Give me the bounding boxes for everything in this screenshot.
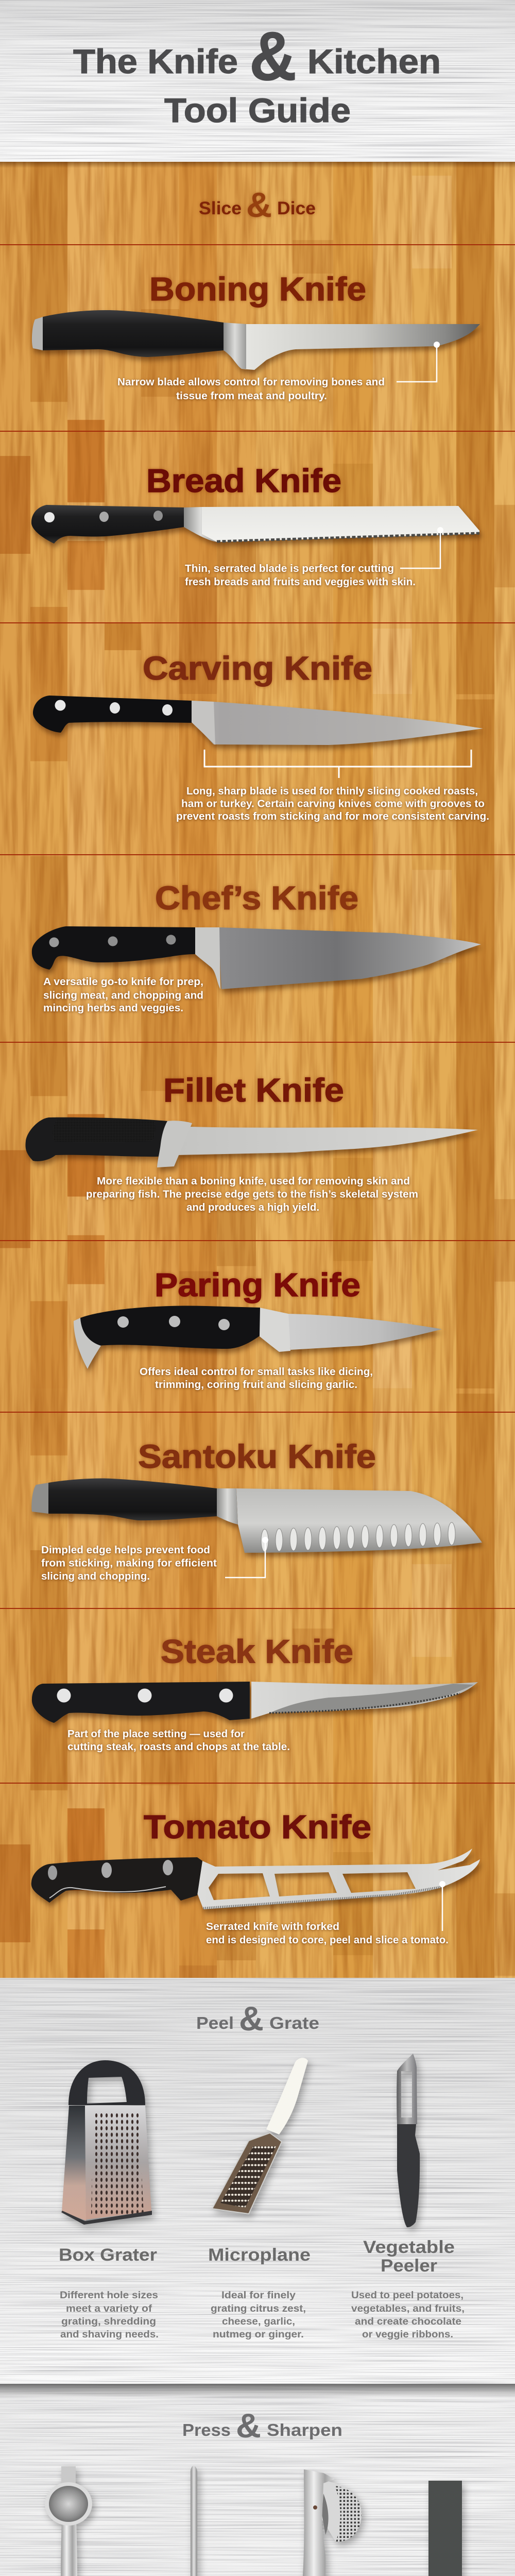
section: boning knife bbox=[32, 270, 480, 402]
tool: lemon press bbox=[45, 2466, 92, 2576]
callout line: forked end bbox=[439, 1881, 445, 1931]
heading: Steak Knife: Steak Knife bbox=[161, 1633, 353, 1670]
knife: tomato knife illustration bbox=[31, 1849, 480, 1909]
section: carving knife bbox=[33, 650, 489, 822]
description: boning knife: tissue from meat and poultry. bbox=[176, 391, 327, 402]
tool: potato ricer bbox=[302, 2469, 362, 2576]
description: santoku knife: slicing and chopping. bbox=[41, 1571, 150, 1582]
description: boning knife: Narrow blade allows control for removing bones and bbox=[117, 377, 385, 388]
panel: press and sharpen bbox=[0, 2384, 515, 2576]
description: microplane: nutmeg or ginger. bbox=[213, 2329, 304, 2340]
description: carving knife: ham or turkey. Certain carving knives come with grooves to bbox=[181, 799, 485, 810]
description: microplane: cheese, garlic, bbox=[222, 2316, 295, 2327]
description: vegetable peeler bbox=[351, 2290, 465, 2340]
bracket: blade length bbox=[204, 750, 471, 778]
section: bread knife bbox=[31, 462, 479, 588]
heading: Peel & Grate: & bbox=[239, 1999, 264, 2038]
description: microplane bbox=[211, 2290, 306, 2340]
panel: brushed steel header bbox=[0, 0, 515, 162]
tool: knife steel bbox=[183, 2466, 204, 2576]
description: santoku knife: Dimpled edge helps prevent food bbox=[41, 1545, 210, 1556]
heading: Boning Knife: Boning Knife bbox=[149, 270, 366, 308]
description: chef's knife bbox=[43, 976, 203, 1014]
tool: vegetable peeler bbox=[397, 2054, 420, 2227]
tool: sharpening stone bbox=[428, 2481, 462, 2576]
heading: Press & Sharpen: & bbox=[236, 2406, 261, 2445]
heading: Paring Knife: Paring Knife bbox=[154, 1266, 360, 1303]
description: tomato knife bbox=[206, 1921, 449, 1946]
description: carving knife: Long, sharp blade is used for thinly slicing cooked roasts, bbox=[186, 786, 478, 797]
description: vegetable peeler: vegetables, and fruits, bbox=[351, 2303, 465, 2314]
title: Tool Guide bbox=[164, 91, 351, 129]
heading: Fillet Knife: Fillet Knife bbox=[163, 1072, 344, 1109]
description: carving knife bbox=[176, 786, 489, 822]
description: steak knife: Part of the place setting — used for bbox=[67, 1728, 245, 1740]
heading: Press & Sharpen: Sharpen bbox=[267, 2420, 342, 2439]
label: Vegetable Peeler: Peeler bbox=[381, 2256, 437, 2276]
description: fillet knife: and produces a high yield. bbox=[186, 1202, 319, 1213]
title: & bbox=[249, 18, 297, 95]
label: Box Grater: Box Grater bbox=[59, 2245, 157, 2265]
description: fillet knife: More flexible than a boning knife, used for removing skin and bbox=[97, 1176, 410, 1187]
knife: fillet knife illustration bbox=[26, 1117, 478, 1167]
description: fillet knife: preparing fish. The precise edge gets to the fish’s skeletal system bbox=[86, 1189, 418, 1200]
knife: paring knife illustration bbox=[74, 1306, 442, 1369]
description: paring knife: trimming, coring fruit and slicing garlic. bbox=[155, 1379, 357, 1391]
section: tomato knife bbox=[31, 1808, 480, 1946]
description: steak knife: cutting steak, roasts and chops at the table. bbox=[67, 1741, 290, 1753]
panel: wood cutting board, slice and dice bbox=[0, 162, 515, 1978]
heading: Santoku Knife: Santoku Knife bbox=[138, 1438, 376, 1475]
description: vegetable peeler: Used to peel potatoes, bbox=[351, 2290, 464, 2301]
heading: Slice & Dice: Dice bbox=[277, 198, 316, 218]
title bbox=[73, 18, 441, 129]
tool: microplane bbox=[212, 2058, 308, 2214]
description: bread knife: fresh breads and fruits and veggies with skin. bbox=[185, 577, 416, 588]
section: chef's knife bbox=[32, 879, 481, 1014]
knife: bread knife illustration bbox=[31, 505, 479, 544]
heading: Peel & Grate: Peel bbox=[196, 2013, 234, 2032]
heading: Slice & Dice: & bbox=[246, 185, 272, 225]
label: Microplane: Microplane bbox=[208, 2245, 311, 2265]
description: chef's knife: slicing meat, and chopping and bbox=[43, 990, 203, 1002]
description: microplane: Ideal for finely bbox=[221, 2290, 296, 2301]
description: bread knife: Thin, serrated blade is perfect for cutting bbox=[185, 563, 394, 574]
description: santoku knife: from sticking, making for efficient bbox=[41, 1558, 217, 1569]
callout line: dimpled edge bbox=[225, 1537, 268, 1578]
tool: box grater bbox=[61, 2060, 152, 2225]
heading: Peel & Grate: Grate bbox=[269, 2013, 319, 2032]
callout line: serrated edge bbox=[400, 527, 443, 568]
section: fillet knife bbox=[26, 1072, 478, 1213]
label: Vegetable Peeler: Vegetable bbox=[363, 2238, 455, 2257]
description: box grater: grating, shredding bbox=[61, 2316, 156, 2327]
description: box grater bbox=[60, 2290, 159, 2340]
callout line: blade edge bbox=[397, 342, 440, 382]
heading: Slice & Dice bbox=[199, 185, 316, 225]
label: Box Grater bbox=[59, 2245, 159, 2340]
knife: steak knife illustration bbox=[32, 1682, 478, 1723]
description: box grater: and shaving needs. bbox=[60, 2329, 159, 2340]
description: tomato knife: Serrated knife with forked bbox=[206, 1921, 339, 1933]
description: santoku knife bbox=[41, 1545, 217, 1582]
description: fillet knife bbox=[86, 1176, 418, 1213]
description: steak knife bbox=[67, 1728, 290, 1753]
heading: Press & Sharpen bbox=[182, 2406, 342, 2445]
description: vegetable peeler: and create chocolate bbox=[355, 2316, 461, 2327]
knife: boning knife illustration bbox=[32, 310, 480, 370]
description: paring knife bbox=[140, 1366, 373, 1391]
panel: peel and grate bbox=[0, 1978, 515, 2384]
heading: Slice & Dice: Slice bbox=[199, 198, 242, 218]
knife: santoku knife illustration bbox=[31, 1478, 482, 1553]
description: boning knife bbox=[117, 377, 385, 402]
label: Vegetable Peeler bbox=[351, 2238, 465, 2340]
heading: Carving Knife: Carving Knife bbox=[143, 650, 372, 687]
description: vegetable peeler: or veggie ribbons. bbox=[362, 2329, 453, 2340]
heading: Bread Knife: Bread Knife bbox=[146, 462, 341, 499]
description: box grater: meet a variety of bbox=[66, 2303, 152, 2314]
description: chef's knife: mincing herbs and veggies. bbox=[43, 1003, 183, 1014]
title: Kitchen bbox=[307, 42, 441, 80]
description: paring knife: Offers ideal control for small tasks like dicing, bbox=[140, 1366, 373, 1378]
heading: Peel & Grate bbox=[196, 1999, 319, 2038]
heading: Chef's Knife: Chef’s Knife bbox=[155, 879, 358, 917]
description: box grater: Different hole sizes bbox=[60, 2290, 158, 2301]
section: paring knife bbox=[74, 1266, 442, 1391]
label: Microplane bbox=[208, 2245, 311, 2340]
section: steak knife bbox=[32, 1633, 478, 1753]
description: chef's knife: A versatile go-to knife for prep, bbox=[43, 976, 203, 988]
knife: carving knife illustration bbox=[33, 696, 483, 745]
description: microplane: grating citrus zest, bbox=[211, 2303, 306, 2314]
heading: Tomato Knife: Tomato Knife bbox=[144, 1808, 371, 1845]
description: carving knife: prevent roasts from sticking and for more consistent carving. bbox=[176, 811, 489, 822]
section: santoku knife bbox=[31, 1438, 482, 1582]
title: The Knife bbox=[73, 42, 238, 80]
heading: Press & Sharpen: Press bbox=[182, 2420, 231, 2439]
knife: chef's knife illustration bbox=[32, 926, 481, 989]
description: bread knife bbox=[185, 563, 416, 588]
description: tomato knife: end is designed to core, peel and slice a tomato. bbox=[206, 1935, 449, 1946]
